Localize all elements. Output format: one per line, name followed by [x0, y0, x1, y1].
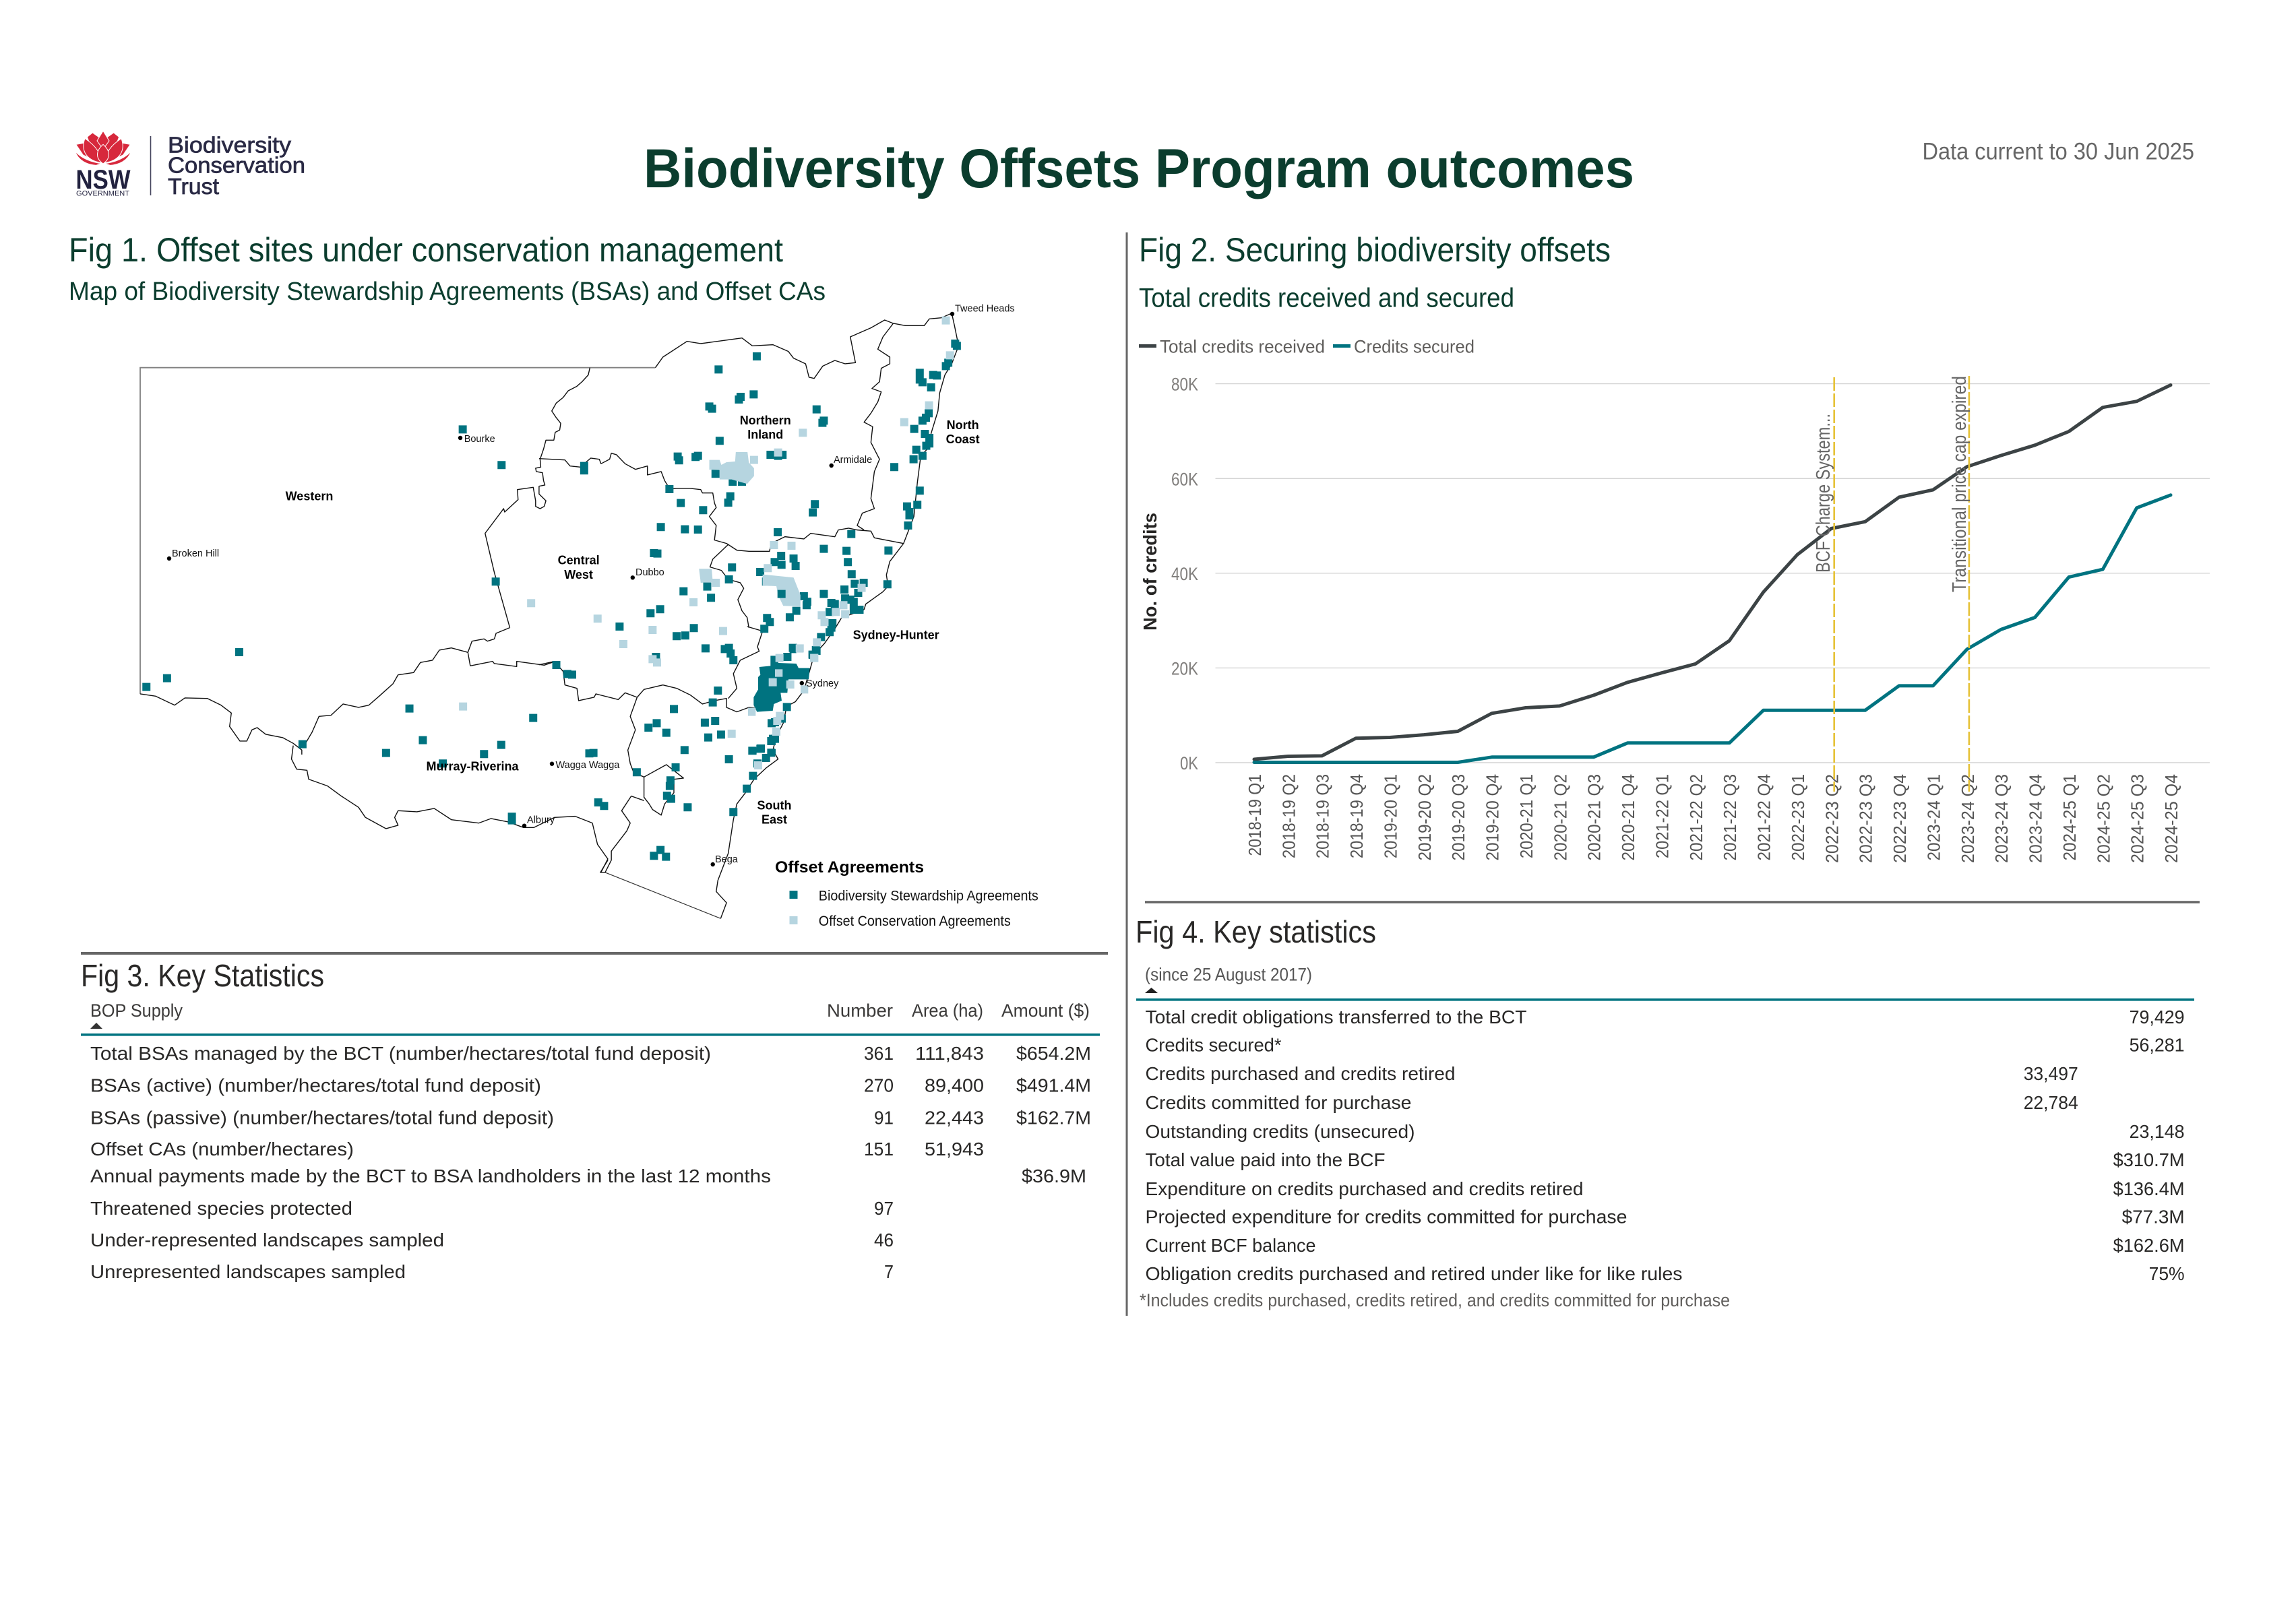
city labels and dots: Wagga Wagga — [555, 760, 620, 771]
table rows: $162.7M — [1016, 1108, 1091, 1128]
region labels: Inland — [747, 428, 783, 441]
region labels: Western — [286, 490, 333, 503]
x-axis labels: 2024-25 Q3 — [2128, 774, 2148, 863]
panel: Fig 1 map — [69, 231, 1038, 929]
city labels and dots: Tweed Heads — [955, 304, 1015, 315]
reference line: Transitional price cap expired: Transitional price cap expired — [1949, 376, 1971, 592]
city labels and dots: Broken Hill — [172, 548, 219, 559]
x-axis labels: 2024-25 Q1 — [2059, 774, 2080, 861]
table rows: 91 — [874, 1108, 894, 1128]
table rows: BSAs (passive) (number/hectares/total fund deposit) — [90, 1108, 554, 1128]
map legend: Biodiversity Stewardship Agreements — [819, 889, 1038, 904]
Offset CA site markers — [463, 317, 950, 769]
panel: Fig 2 line chart — [1139, 231, 2210, 863]
icon: waratah flower — [75, 131, 131, 165]
table rows: Total value paid into the BCF — [1146, 1149, 1386, 1170]
table rows: Expenditure on credits purchased and credits retired — [1146, 1178, 1584, 1199]
city labels and dots — [167, 304, 1015, 866]
region labels: East — [762, 813, 787, 827]
x-axis labels: 2024-25 Q4 — [2161, 774, 2181, 863]
BSA site markers — [146, 340, 957, 861]
table rows: Annual payments made by the BCT to BSA landholders in the last 12 months — [90, 1166, 771, 1186]
table rows: $136.4M — [2113, 1178, 2185, 1199]
city labels and dots: Bourke — [464, 434, 495, 445]
table rows: $310.7M — [2113, 1149, 2185, 1170]
table rows: Current BCF balance — [1146, 1235, 1315, 1256]
logo: NSW Government / Biodiversity Conservation Trust — [75, 131, 305, 199]
map legend — [775, 858, 1038, 929]
city labels and dots: Sydney — [806, 678, 839, 689]
table rows: 22,443 — [925, 1108, 984, 1128]
table rows: 22,784 — [2024, 1092, 2078, 1113]
city labels and dots: Armidale — [834, 455, 872, 466]
reference line: BCF Charge System: BCF Charge System... — [1813, 414, 1834, 573]
table rows: Credits purchased and credits retired — [1146, 1063, 1456, 1084]
heading: Fig 2: Fig 2. Securing biodiversity offsets — [1139, 231, 1611, 269]
table rows: $162.6M — [2113, 1235, 2185, 1256]
table rows: Credits committed for purchase — [1146, 1092, 1411, 1113]
subheading: chart description: Total credits received and secured — [1139, 283, 1514, 313]
table header: BOP Supply — [90, 1000, 183, 1021]
organisation name: Conservation — [168, 153, 305, 178]
table rows: 111,843 — [915, 1043, 984, 1064]
x-axis labels: 2020-21 Q2 — [1550, 774, 1570, 861]
city labels and dots: Dubbo — [635, 567, 664, 578]
table rows: 361 — [864, 1043, 894, 1064]
region labels: Coast — [946, 433, 980, 446]
table header: Amount ($) — [1001, 1000, 1090, 1021]
table rows: $654.2M — [1016, 1043, 1091, 1064]
city labels and dots: Albury — [527, 815, 555, 826]
heading: Fig 3: Fig 3. Key Statistics — [81, 958, 324, 993]
panel: Fig 3 key statistics table — [81, 958, 1100, 1282]
table rows: Obligation credits purchased and retired under like for like rules — [1146, 1263, 1682, 1284]
line: credits secured — [1254, 495, 2171, 763]
x-axis labels: 2020-21 Q3 — [1584, 774, 1605, 861]
y-axis labels and gridlines: 80K — [1171, 375, 1198, 395]
heading: Fig 1: Fig 1. Offset sites under conservation management — [69, 231, 783, 269]
region labels: South — [757, 799, 791, 813]
y-axis title: No. of credits — [1140, 513, 1160, 631]
x-axis labels: 2024-25 Q2 — [2093, 774, 2113, 863]
organisation name: Biodiversity — [168, 133, 292, 158]
x-axis labels: 2023-24 Q4 — [2026, 774, 2046, 863]
x-axis labels: 2022-23 Q4 — [1890, 774, 1910, 863]
table rows: 151 — [864, 1139, 894, 1159]
table rows: Credits secured* — [1146, 1034, 1282, 1055]
x-axis labels: 2018-19 Q3 — [1313, 774, 1333, 858]
region labels: Murray-Riverina — [426, 759, 520, 773]
table rows: Offset CAs (number/hectares) — [90, 1139, 354, 1159]
x-axis labels: 2018-19 Q2 — [1278, 774, 1299, 858]
x-axis labels: 2022-23 Q3 — [1856, 774, 1876, 863]
Sydney basin Offset CA markers — [748, 647, 818, 736]
line: total credits received — [1254, 385, 2171, 759]
table rows — [1146, 1007, 2185, 1284]
table rows: Projected expenditure for credits committed for purchase — [1146, 1206, 1627, 1228]
y-axis labels and gridlines: 40K — [1171, 564, 1198, 584]
panel: Fig 4 key statistics table — [1136, 914, 2194, 1310]
table rows: $77.3M — [2122, 1206, 2185, 1228]
title: Biodiversity Offsets Program outcomes — [644, 138, 1634, 199]
y-axis labels and gridlines: 0K — [1180, 753, 1198, 773]
table rows: $491.4M — [1016, 1075, 1091, 1096]
table header — [81, 1000, 1100, 1036]
table rows: 79,429 — [2130, 1007, 2185, 1027]
city labels and dots: Bega — [715, 854, 739, 865]
region labels: Central — [558, 554, 600, 567]
table rows: 75% — [2149, 1263, 2185, 1284]
table rows: 7 — [884, 1261, 894, 1282]
table rows: 270 — [864, 1075, 894, 1096]
region labels: Northern — [740, 414, 791, 427]
table rows: Outstanding credits (unsecured) — [1146, 1121, 1415, 1142]
x-axis labels: 2020-21 Q1 — [1516, 774, 1537, 858]
x-axis labels: 2018-19 Q1 — [1245, 774, 1265, 856]
x-axis labels: 2022-23 Q2 — [1822, 774, 1842, 863]
table rows: 51,943 — [925, 1139, 984, 1159]
footnote: *Includes credits purchased, credits retired, and credits committed for purchase — [1140, 1290, 1730, 1310]
table rows: Threatened species protected — [90, 1198, 352, 1219]
table header: Area (ha) — [912, 1000, 983, 1021]
x-axis labels: 2018-19 Q4 — [1346, 774, 1367, 858]
x-axis labels: 2021-22 Q1 — [1652, 774, 1672, 858]
x-axis labels — [1245, 774, 2181, 863]
x-axis labels: 2021-22 Q3 — [1720, 774, 1740, 861]
y-axis labels and gridlines — [1171, 375, 2210, 773]
y-axis labels and gridlines: 60K — [1171, 469, 1198, 489]
x-axis labels: 2023-24 Q1 — [1923, 774, 1944, 861]
x-axis labels: 2019-20 Q4 — [1483, 774, 1503, 861]
organisation name — [168, 133, 305, 199]
chart legend: Credits secured — [1354, 337, 1475, 357]
table rows: 89,400 — [925, 1075, 984, 1096]
x-axis labels: 2019-20 Q2 — [1415, 774, 1435, 861]
x-axis labels: 2019-20 Q1 — [1380, 774, 1400, 858]
table rows: Total credit obligations transferred to the BCT — [1146, 1007, 1527, 1027]
map of NSW regions and offset sites — [140, 304, 1038, 929]
table rows: $36.9M — [1022, 1166, 1086, 1186]
y-axis labels and gridlines: 20K — [1171, 658, 1198, 678]
x-axis labels: 2020-21 Q4 — [1618, 774, 1638, 861]
table rows: 97 — [874, 1198, 894, 1219]
x-axis labels: 2023-24 Q3 — [1991, 774, 2012, 863]
region labels: Sydney-Hunter — [853, 628, 939, 641]
map legend: Offset Agreements — [775, 858, 924, 877]
table rows: 23,148 — [2130, 1121, 2185, 1142]
chart legend: Total credits received — [1160, 337, 1325, 357]
x-axis labels: 2021-22 Q2 — [1686, 774, 1706, 861]
x-axis labels: 2021-22 Q4 — [1754, 774, 1774, 861]
table rows — [90, 1043, 1091, 1282]
subheading: map description: Map of Biodiversity Stewardship Agreements (BSAs) and Offset CAs — [69, 278, 826, 306]
x-axis labels: 2022-23 Q1 — [1788, 774, 1808, 861]
table rows: Unrepresented landscapes sampled — [90, 1261, 406, 1282]
table subheader — [1136, 965, 2194, 1001]
Sydney basin marker cluster — [749, 647, 821, 755]
heading: Fig 4: Fig 4. Key statistics — [1136, 914, 1376, 949]
table header: Number — [827, 1000, 893, 1021]
map legend: Offset Conservation Agreements — [819, 914, 1011, 929]
data currency note: Data current to 30 Jun 2025 — [1922, 139, 2194, 165]
table rows: 46 — [874, 1230, 894, 1250]
region labels — [286, 414, 980, 827]
x-axis labels: 2019-20 Q3 — [1448, 774, 1468, 861]
x-axis labels: 2023-24 Q2 — [1958, 774, 1978, 863]
organisation name: Trust — [168, 174, 219, 199]
table subheader: (since 25 August 2017) — [1145, 965, 1312, 985]
table rows: Total BSAs managed by the BCT (number/hectares/total fund deposit) — [90, 1043, 711, 1064]
table rows: 33,497 — [2024, 1063, 2078, 1084]
region labels: North — [947, 418, 979, 432]
table rows: Under-represented landscapes sampled — [90, 1230, 444, 1250]
chart legend — [1139, 337, 1475, 357]
region labels: West — [564, 568, 593, 581]
NSW wordmark: NSW — [75, 165, 131, 195]
table rows: 56,281 — [2130, 1034, 2185, 1055]
table rows: BSAs (active) (number/hectares/total fund deposit) — [90, 1075, 541, 1096]
GOVERNMENT wordmark: GOVERNMENT — [76, 190, 129, 198]
